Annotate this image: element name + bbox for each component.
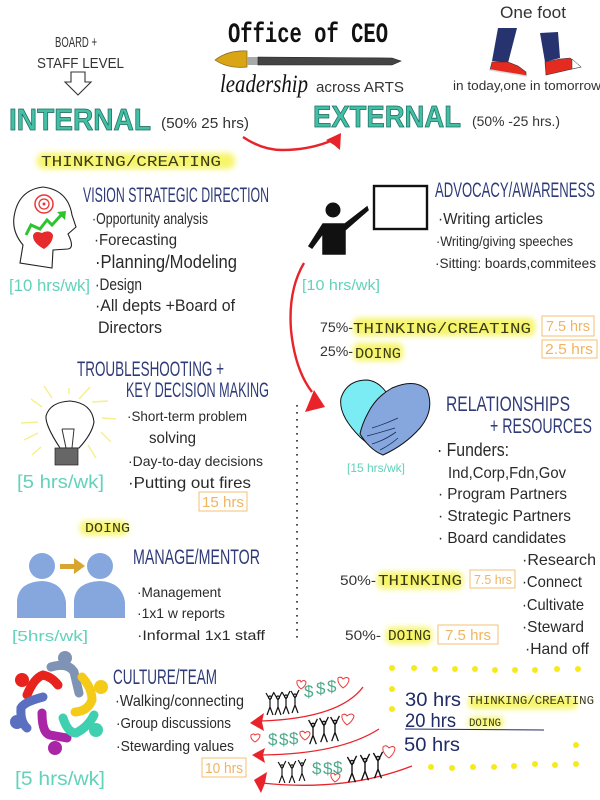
vision section: ·Planning/Modeling — [95, 252, 237, 272]
doing highlight label: DOING — [85, 521, 130, 537]
weekly totals: 20 hrs — [405, 711, 456, 732]
arrows, people, dollars and hearts: $ — [279, 730, 289, 749]
relationships section: · Strategic Partners — [438, 508, 571, 525]
vision section: ·All depts +Board of — [95, 296, 235, 315]
culture section: CULTURE/TEAM — [113, 666, 217, 689]
manage/mentor section: ·Management — [137, 584, 221, 600]
split: advocacy thinking and doing: DOING — [355, 346, 401, 363]
troubleshooting section: ·Putting out fires — [128, 475, 251, 492]
split: relationships thinking and doing: 50%- — [345, 627, 381, 643]
manage/mentor section: ·1x1 w reports — [137, 605, 225, 621]
advocacy section — [435, 179, 596, 271]
internal heading: INTERNAL — [9, 102, 151, 137]
feet caption: in today,one in tomorrow — [453, 78, 600, 93]
troubleshooting section: KEY DECISION MAKING — [126, 379, 269, 402]
weekly totals — [404, 690, 594, 756]
advocacy section: ·Writing articles — [438, 211, 543, 228]
arrow: down outline — [65, 72, 91, 95]
subtitle: leadership — [220, 71, 308, 98]
external heading — [313, 99, 560, 134]
split: relationships thinking and doing: DOING — [388, 628, 431, 645]
split: relationships thinking and doing: 7.5 hrs — [445, 627, 491, 644]
manage/mentor section: MANAGE/MENTOR — [133, 546, 260, 569]
title: Office of CEO — [228, 20, 388, 51]
weekly totals: DOING — [469, 718, 501, 730]
manage hours: [5hrs/wk] — [12, 628, 88, 645]
culture section: ·Stewarding values — [116, 738, 234, 755]
arrows, people, dollars and hearts: $ — [316, 679, 326, 698]
relationship steps list: ·Steward — [522, 619, 584, 636]
hours box: 15 hrs: 15 hrs — [202, 494, 244, 511]
board and staff level label: STAFF LEVEL — [37, 55, 124, 72]
icon: walking feet — [490, 28, 581, 76]
vision section: ·Design — [95, 275, 142, 294]
subtitle — [220, 71, 404, 98]
arrow: advocacy to relationships — [291, 263, 325, 412]
relationships section: · Program Partners — [438, 486, 567, 503]
arrows, people, dollars and hearts: $ — [304, 682, 314, 701]
hours box: 10 hrs: 10 hrs — [205, 760, 243, 777]
culture section: ·Group discussions — [116, 715, 231, 732]
arrows, people, dollars and hearts: $ — [333, 758, 343, 777]
culture section: ·Walking/connecting — [115, 693, 244, 710]
split: relationships thinking and doing: THINKING — [378, 573, 462, 590]
manage/mentor section: ·Informal 1x1 staff — [137, 627, 265, 643]
troubleshooting section: TROUBLESHOOTING + — [77, 358, 224, 381]
culture hours: [5 hrs/wk] — [15, 769, 105, 790]
arrows, people, dollars and hearts: $ — [268, 730, 278, 749]
troubleshooting section: ·Day-to-day decisions — [128, 453, 263, 469]
split: advocacy thinking and doing: 25%- — [320, 343, 353, 359]
arrow: internal to external — [243, 133, 341, 150]
icon: presenter and board — [309, 186, 427, 254]
icon: heart hands — [341, 380, 430, 455]
vision section — [83, 184, 269, 337]
troubleshooting hours: [5 hrs/wk] — [17, 472, 104, 492]
arrows, people, dollars and hearts: $ — [327, 677, 337, 696]
weekly totals: 50 hrs — [404, 735, 460, 756]
vision section: ·Opportunity analysis — [92, 211, 208, 228]
manage/mentor section — [133, 546, 265, 643]
split: advocacy thinking and doing — [320, 316, 597, 363]
relationship steps list — [522, 552, 596, 658]
split: relationships thinking and doing: 50%- — [340, 572, 376, 588]
relationships section: Ind,Corp,Fdn,Gov — [448, 465, 566, 482]
one foot caption: One foot — [500, 3, 566, 22]
vision section: Directors — [98, 318, 162, 337]
relationship steps list: ·Cultivate — [522, 597, 584, 614]
internal heading: (50% 25 hrs) — [161, 115, 249, 132]
troubleshooting section — [77, 358, 269, 492]
vision hours: [10 hrs/wk] — [9, 276, 90, 295]
arrows, people, dollars and hearts: $ — [312, 759, 322, 778]
relationship steps list: ·Connect — [522, 574, 583, 591]
external heading: EXTERNAL — [313, 99, 461, 134]
relationships section: · Board candidates — [438, 530, 566, 547]
relationships section: · Funders: — [437, 440, 509, 460]
internal heading — [9, 102, 249, 137]
weekly totals: THINKING/CREATING — [468, 694, 594, 708]
weekly totals: 30 hrs — [405, 690, 461, 711]
board and staff level label: BOARD + — [55, 34, 97, 51]
culture section — [113, 666, 244, 755]
split: advocacy thinking and doing: 2.5 hrs — [545, 341, 593, 358]
external heading: (50% -25 hrs.) — [472, 113, 560, 129]
icon: paintbrush — [215, 51, 401, 67]
icon: head with target, arrow, heart — [14, 187, 76, 268]
arrows, people, dollars and hearts: $ — [289, 729, 299, 748]
relationship steps list: ·Hand off — [525, 641, 590, 658]
split: advocacy thinking and doing: 75%- — [320, 319, 353, 335]
subtitle: across ARTS — [316, 79, 404, 96]
relationship steps list: ·Research — [522, 552, 596, 569]
advocacy section: ·Sitting: boards,commitees — [435, 255, 596, 271]
vision section: VISION STRATEGIC DIRECTION — [83, 184, 269, 207]
split: relationships thinking and doing: 7.5 hrs — [474, 572, 512, 587]
split: advocacy thinking and doing: 7.5 hrs — [546, 318, 590, 335]
dotted divider — [296, 405, 298, 640]
relationships hours: [15 hrs/wk] — [347, 461, 405, 475]
vision section: ·Forecasting — [94, 232, 177, 249]
split: relationships thinking and doing — [340, 570, 515, 645]
yellow dotted frame — [389, 665, 581, 771]
troubleshooting section: ·Short-term problem — [127, 408, 247, 424]
relationships section — [437, 393, 592, 547]
icon: team circle — [10, 651, 108, 755]
advocacy hours: [10 hrs/wk] — [302, 277, 380, 294]
icon: two people with arrow — [17, 553, 125, 618]
troubleshooting section: solving — [149, 430, 196, 447]
arrows, people, dollars and hearts: $ — [323, 759, 333, 778]
split: advocacy thinking and doing: THINKING/CREATING — [353, 321, 531, 338]
icon: light bulb — [21, 386, 116, 465]
arrows, people, dollars and hearts — [250, 677, 412, 793]
thinking/creating highlight label: THINKING/CREATING — [41, 154, 221, 171]
board and staff level label — [37, 34, 124, 72]
advocacy section: ·Writing/giving speeches — [436, 233, 573, 249]
